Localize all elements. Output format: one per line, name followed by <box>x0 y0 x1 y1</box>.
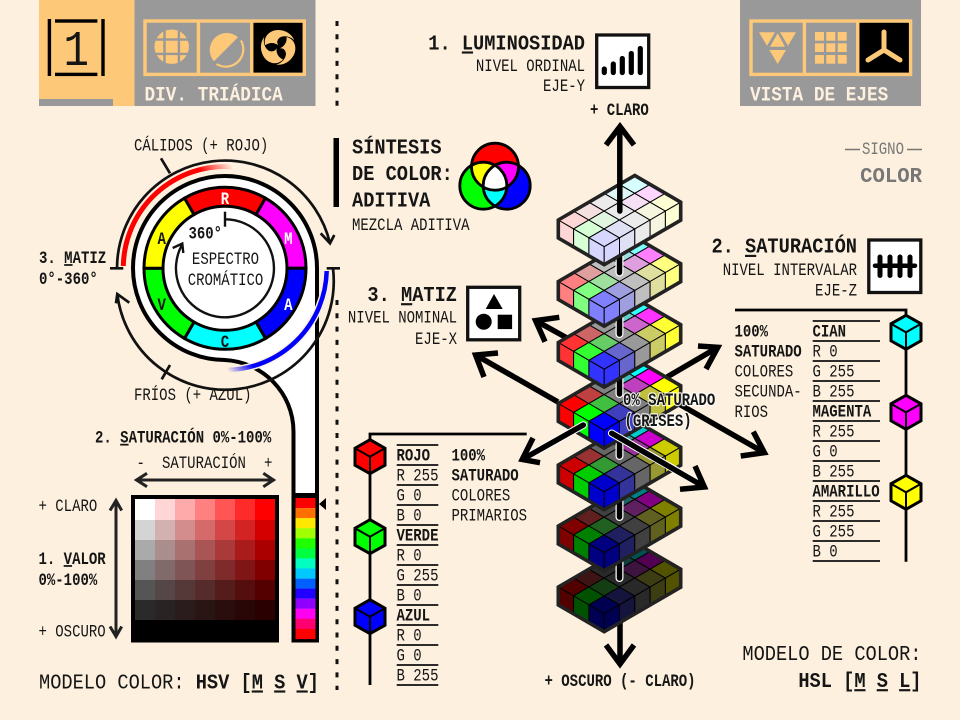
chart: isometric color solid <box>558 176 681 632</box>
icon: additive venn <box>460 143 530 209</box>
heading: saturacion axis <box>711 235 857 301</box>
segment letters: M <box>284 230 292 250</box>
heading: matiz axis <box>348 284 457 350</box>
icon: yellow cube <box>891 475 921 509</box>
arrow: luminosity axis down <box>606 590 634 664</box>
footer: hsl model: MODELO DE COLOR: <box>742 643 922 667</box>
table values: AMARILLO <box>812 482 880 502</box>
table values: VERDE <box>396 526 438 546</box>
table values: B 0 <box>396 586 422 606</box>
note secondaries: 100% <box>734 322 769 342</box>
layer five <box>558 420 681 510</box>
table values: G 0 <box>812 442 838 462</box>
warm arrow <box>110 158 334 268</box>
layer three <box>558 298 681 387</box>
table values <box>812 322 880 562</box>
note secondaries: SATURADO <box>734 342 802 362</box>
label: mas oscuro axis: + OSCURO (- CLARO) <box>544 672 696 692</box>
icon: blue cube <box>355 600 385 634</box>
table values: B 0 <box>812 542 838 562</box>
table values: G 255 <box>812 362 854 382</box>
table values: B 255 <box>812 462 854 482</box>
label: 360 degrees: 360° <box>188 224 222 244</box>
heading: sintesis de color: DE COLOR: <box>352 163 453 187</box>
icon: magenta cube <box>891 395 921 429</box>
heading: saturacion axis: NIVEL INTERVALAR <box>723 261 857 281</box>
arrow: saturation axis right <box>672 400 764 456</box>
heading: sintesis de color: SÍNTESIS <box>352 135 442 161</box>
cool arrow <box>116 268 340 390</box>
panel: secondary colors table <box>734 310 921 562</box>
table values: B 255 <box>396 666 438 686</box>
arrow: luminosity axis up <box>606 126 634 211</box>
arrow: primaries down left <box>522 425 583 463</box>
arrow: hue axis lower <box>476 353 558 402</box>
table values: R 255 <box>396 466 438 486</box>
heading: saturacion axis: EJE-Z <box>815 281 857 301</box>
arrow: saturation horizontal <box>136 473 274 487</box>
table values: R 0 <box>396 546 422 566</box>
footer: hsl model <box>742 643 922 694</box>
note primaries <box>452 446 527 526</box>
label: valor <box>38 550 106 591</box>
arrow: hue axis upper <box>536 317 567 342</box>
layer seven darkest <box>558 542 681 632</box>
icon: three axes <box>868 32 900 60</box>
layer six <box>558 482 681 571</box>
note primaries: 100% <box>452 446 486 466</box>
icon: ordinal bars <box>597 35 649 88</box>
teardrop outline <box>133 176 317 640</box>
panel: header division triadica <box>134 0 316 107</box>
icon: nominal shapes <box>468 287 520 340</box>
note secondaries: COLORES <box>734 362 793 382</box>
inner rotation arrow <box>173 212 274 317</box>
label: matiz 0-360: 3. MATIZ <box>39 249 106 269</box>
note primaries: SATURADO <box>452 466 519 486</box>
table values: B 255 <box>812 382 854 402</box>
table values: R 0 <box>396 626 422 646</box>
icon: triskelion <box>255 30 300 70</box>
heading: luminosidad: 1. LUMINOSIDAD <box>428 32 585 57</box>
label: mas claro: + CLARO <box>38 497 97 517</box>
note primaries: COLORES <box>452 486 510 506</box>
note secondaries: SECUNDA- <box>734 382 802 402</box>
panel: primary colors table <box>355 434 527 686</box>
table values: G 0 <box>396 486 422 506</box>
layer four fully saturated <box>558 359 681 448</box>
table values: CIAN <box>812 322 846 342</box>
label: div triadica: DIV. TRIÁDICA <box>144 84 283 107</box>
segment letters: A <box>158 230 166 250</box>
arrow: value vertical <box>110 500 122 636</box>
segment letters: A <box>284 296 293 316</box>
table values: R 255 <box>812 422 854 442</box>
label: zero saturation greys: (GRISES) <box>624 412 692 432</box>
heading: sintesis de color <box>334 135 470 236</box>
icon: red cube <box>355 440 385 474</box>
table values: ROJO <box>396 446 430 466</box>
icon: green cube <box>355 520 385 554</box>
segment letters: C <box>221 333 230 353</box>
table values <box>396 446 438 686</box>
table values: MAGENTA <box>812 402 872 422</box>
label: saturacion scale <box>136 453 272 474</box>
heading: saturacion axis: 2. SATURACIÓN <box>711 235 857 260</box>
table values: B 0 <box>396 506 422 526</box>
cool arc blue <box>228 271 327 370</box>
number one: 1 <box>64 23 89 80</box>
heading: luminosidad: EJE-Y <box>543 77 585 97</box>
heading: matiz axis: EJE-X <box>415 330 457 350</box>
arrow: saturation axis upper <box>667 346 718 377</box>
rules right table <box>813 321 880 561</box>
label: calidos: CÁLIDOS (+ ROJO) <box>134 135 268 156</box>
heading: matiz axis: 3. MATIZ <box>367 284 457 308</box>
label: signo color <box>845 140 922 189</box>
panel: header left number <box>39 0 134 106</box>
label: signo color: SIGNO <box>862 140 904 160</box>
icon: grid <box>815 32 847 64</box>
icon: cyan cube <box>891 315 921 349</box>
heading: luminosidad: NIVEL ORDINAL <box>476 57 585 77</box>
label: espectro cromatico <box>188 250 263 291</box>
panel: color wheel <box>110 135 340 641</box>
table values: AZUL <box>396 606 430 626</box>
label: espectro cromatico: ESPECTRO <box>192 250 259 270</box>
heading: luminosidad <box>428 32 585 97</box>
layer one lightest <box>558 176 681 265</box>
label: mas oscuro: + OSCURO <box>38 622 106 642</box>
note secondaries <box>734 322 802 423</box>
segment letters <box>158 190 293 353</box>
segment letters: V <box>158 296 166 316</box>
icon: interval scale <box>869 240 921 292</box>
chart: saturation value matrix <box>133 497 277 640</box>
dotted divider <box>336 21 338 690</box>
icon: globe <box>154 30 189 64</box>
note primaries: PRIMARIOS <box>452 506 527 526</box>
arrow: saturation down right <box>612 433 704 489</box>
table values: R 0 <box>812 342 838 362</box>
label: valor: 0%-100% <box>38 571 98 591</box>
table values: R 255 <box>812 502 854 522</box>
footer: hsl model: HSL [M S L] <box>798 670 922 694</box>
label: saturacion 0-100: 2. SATURACIÓN 0%-100% <box>95 427 272 448</box>
heading: matiz axis: NIVEL NOMINAL <box>348 308 457 328</box>
label: saturacion scale: + <box>264 454 272 474</box>
label: vista de ejes: VISTA DE EJES <box>750 84 888 107</box>
table values: G 255 <box>812 522 854 542</box>
heading: sintesis de color: ADITIVA <box>352 190 431 214</box>
label: mas claro axis: + CLARO <box>590 101 649 121</box>
segment letters: R <box>221 190 230 210</box>
panel: header axis view <box>740 0 921 107</box>
label: frios: FRÍOS (+ AZUL) <box>134 385 251 406</box>
label: espectro cromatico: CROMÁTICO <box>188 270 263 291</box>
warm arc red <box>123 166 232 266</box>
label: zero saturation greys <box>623 391 715 432</box>
label: matiz 0-360 <box>39 249 106 290</box>
label: valor: 1. VALOR <box>38 550 106 570</box>
heading: sintesis de color: MEZCLA ADITIVA <box>352 216 470 236</box>
table values: G 255 <box>396 566 438 586</box>
label: signo color: COLOR <box>860 165 922 189</box>
label: saturacion scale: - <box>136 454 145 474</box>
icon: triangles <box>759 32 796 64</box>
footer: hsv model: MODELO COLOR: HSV [M S V] <box>39 671 319 696</box>
hue marker <box>319 498 326 510</box>
label: saturacion scale: SATURACIÓN <box>162 453 246 474</box>
wheel segments <box>144 187 306 349</box>
label: matiz 0-360: 0°-360° <box>39 270 98 290</box>
icon: half circle <box>210 33 243 67</box>
hue bar <box>296 493 316 639</box>
table values: G 0 <box>396 646 422 666</box>
note secondaries: RIOS <box>734 403 768 423</box>
layer two <box>558 237 681 326</box>
rules left table <box>397 445 438 685</box>
label: zero saturation greys: 0% SATURADO <box>623 391 715 411</box>
